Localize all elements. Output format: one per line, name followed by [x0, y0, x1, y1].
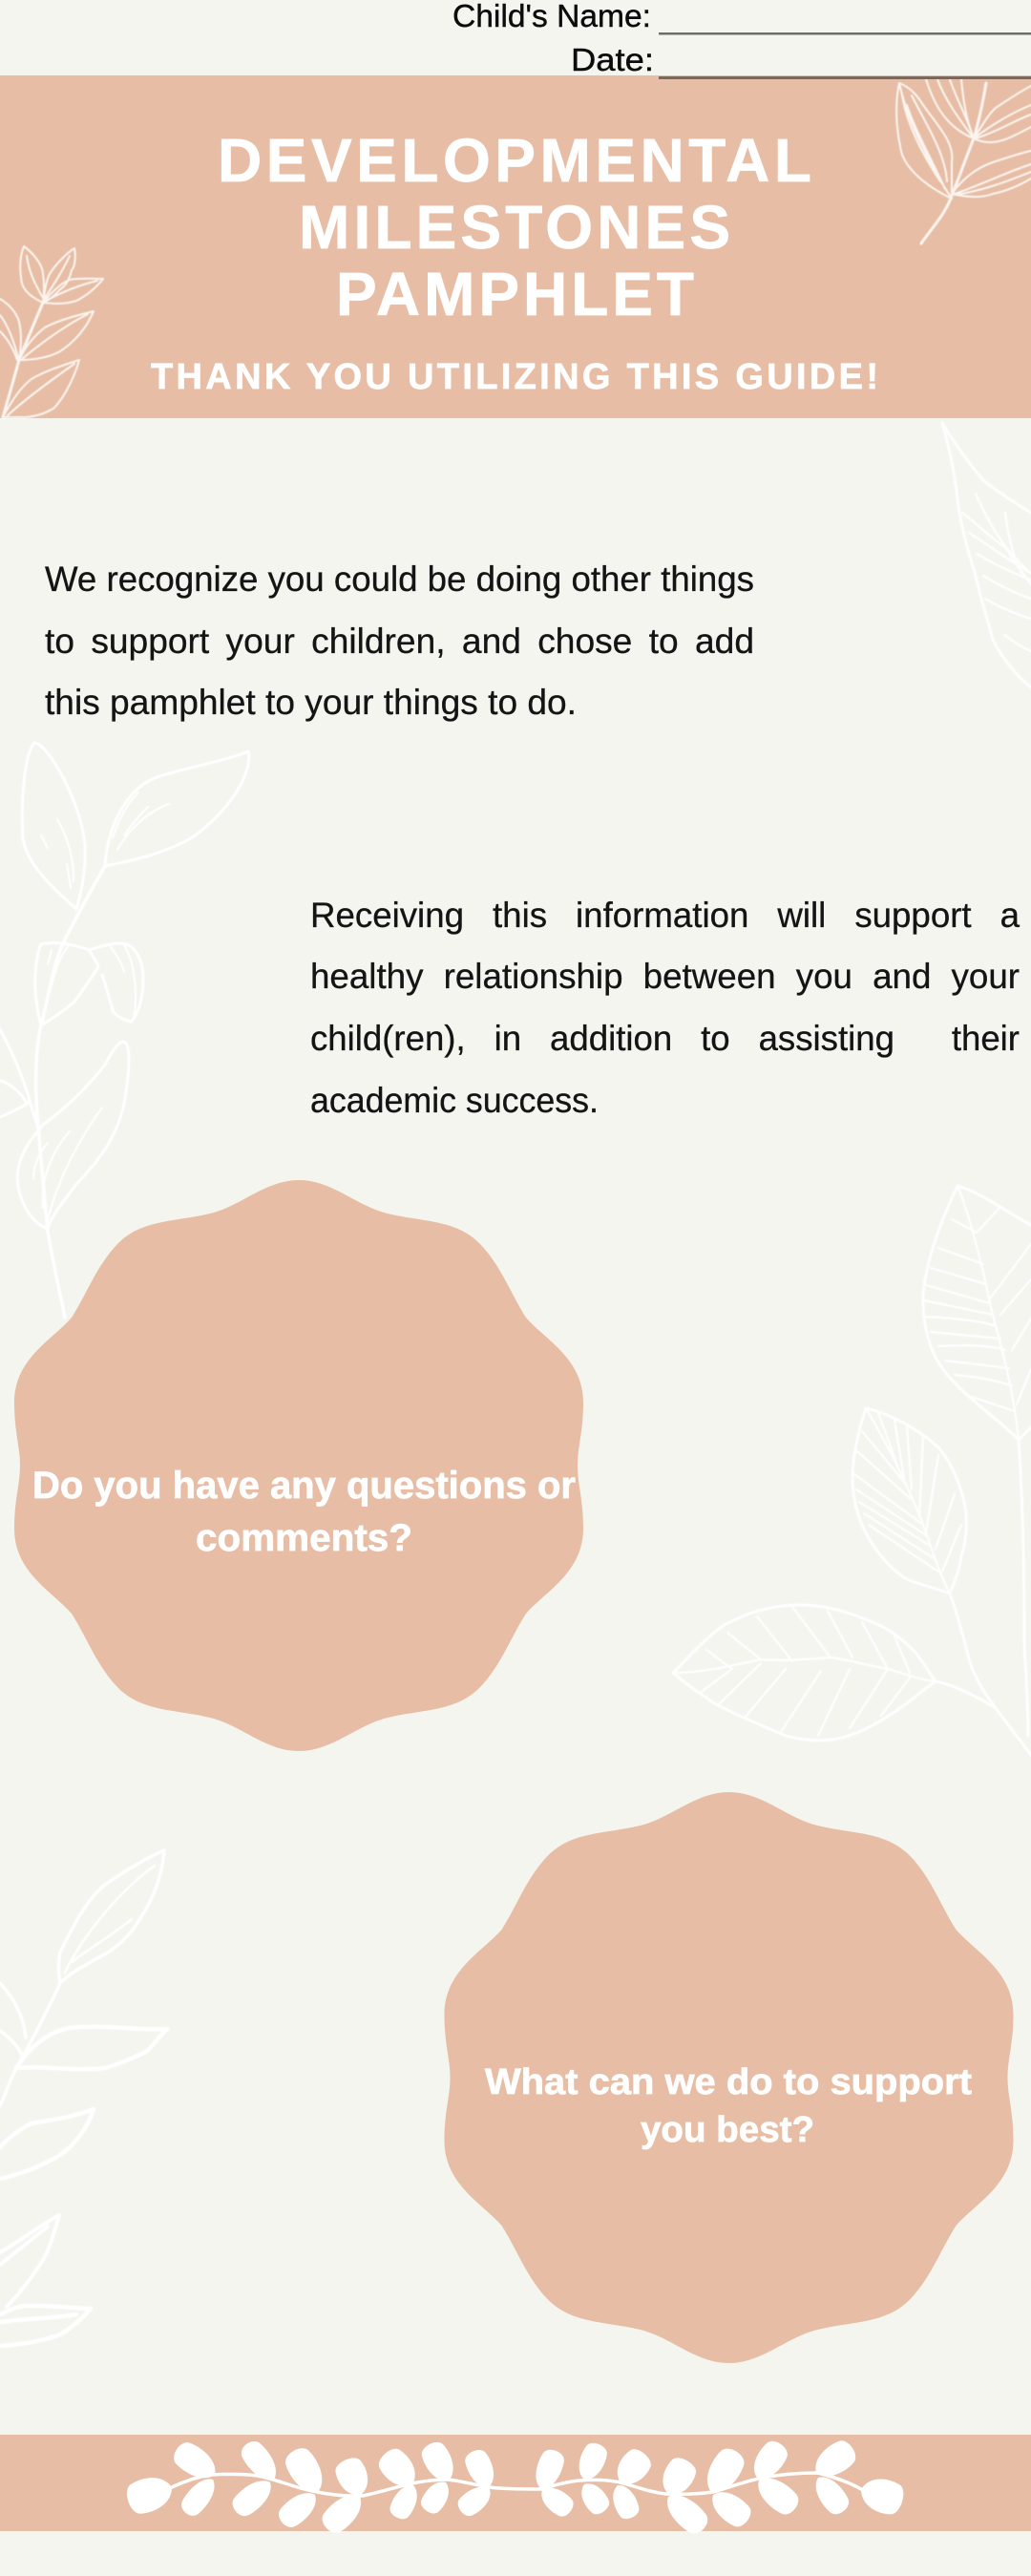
title: MILESTONES	[299, 193, 730, 262]
callout: how to support	[445, 1792, 1014, 2363]
callout: how to support: you best?	[641, 2110, 814, 2150]
text block: intro paragraph: We recognize you could be doing other things	[45, 560, 754, 599]
icon: banner leaves top right	[896, 79, 1031, 243]
text block: intro paragraph	[45, 560, 754, 722]
footer band	[0, 2435, 1031, 2531]
icon: footer garland	[123, 2436, 907, 2539]
icon: banner leaves bottom left	[0, 246, 103, 417]
header banner	[0, 75, 1031, 418]
icon: leaves right with veins	[673, 1186, 1031, 1755]
callout: questions or comments: Do you have any questions or	[32, 1465, 576, 1507]
text block: second paragraph: academic success.	[310, 1081, 599, 1120]
text block: intro paragraph: this pamphlet to your things to do.	[45, 683, 577, 722]
text block: second paragraph: Receiving this information will support a	[310, 896, 1020, 935]
subtitle: THANK YOU UTILIZING THIS GUIDE!	[151, 357, 878, 397]
callout: questions or comments: comments?	[196, 1517, 412, 1559]
text block: intro paragraph: to support your children, and chose to add	[45, 622, 754, 661]
form field: date	[571, 42, 1031, 79]
callout: how to support: What can we do to support	[485, 2062, 972, 2102]
icon: white vine left	[0, 743, 249, 1318]
icon: white vine lower left	[0, 1850, 167, 2346]
text block: second paragraph: healthy relationship between you and your	[310, 957, 1020, 996]
callout: questions or comments	[14, 1180, 583, 1751]
title	[218, 126, 811, 328]
text block: second paragraph: child(ren), in addition to assisting their	[310, 1019, 1020, 1058]
icon: white leaf top right	[942, 423, 1031, 687]
title: DEVELOPMENTAL	[218, 126, 811, 195]
title: PAMPHLET	[336, 260, 694, 328]
text block: second paragraph	[310, 896, 1020, 1120]
form field: date: Date:	[571, 42, 654, 77]
